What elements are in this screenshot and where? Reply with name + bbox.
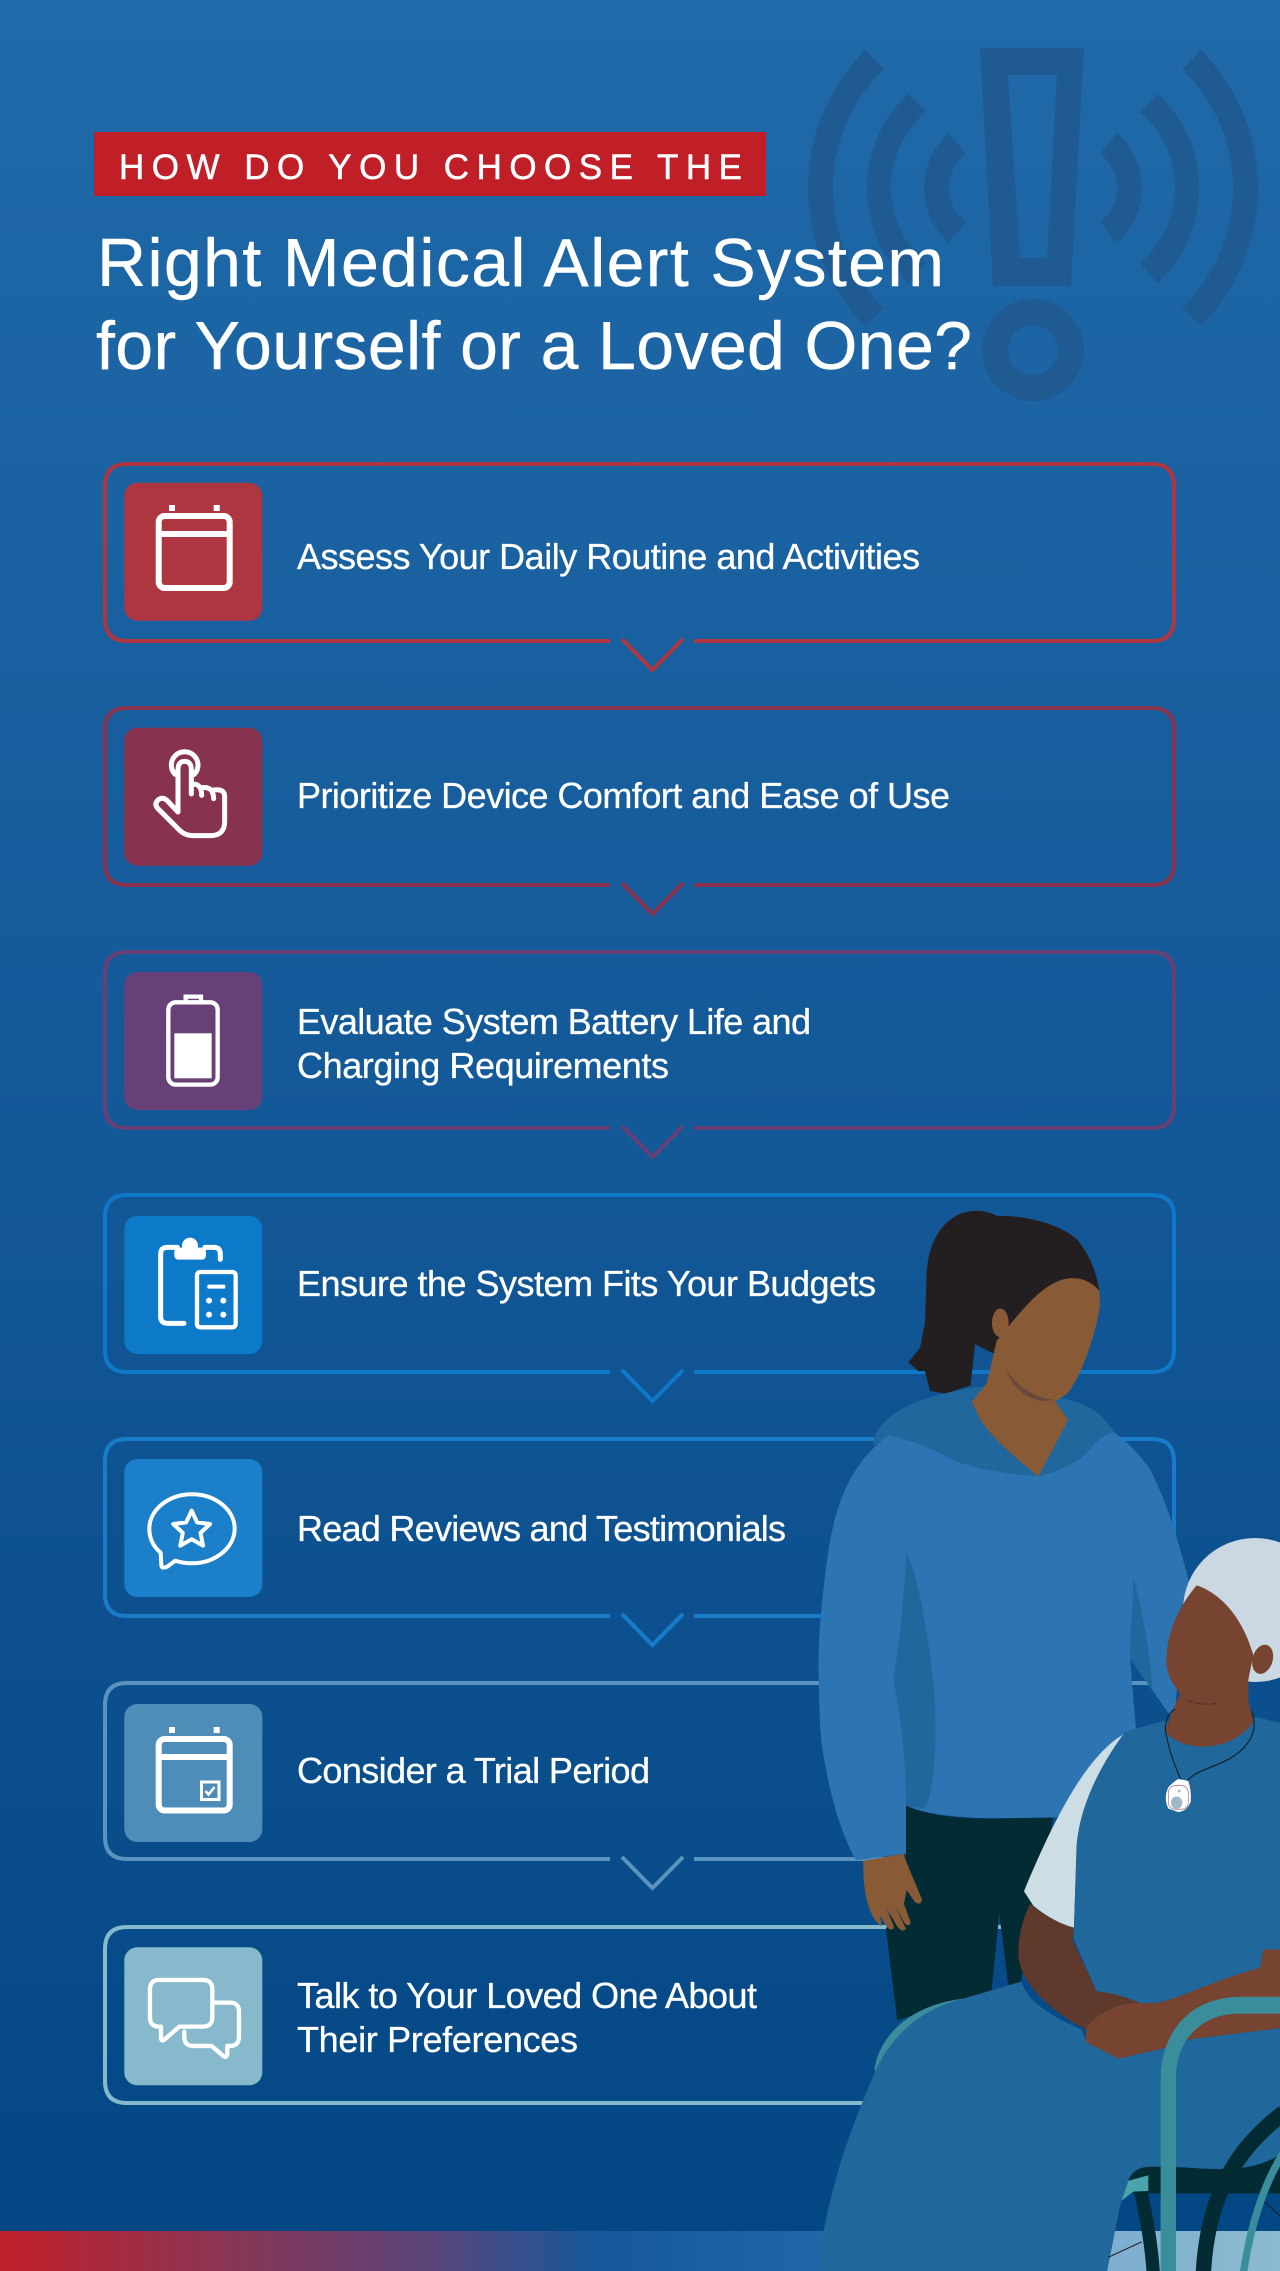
text: Talk to Your Loved One About bbox=[297, 1975, 757, 2016]
right sleeve bbox=[1255, 1780, 1280, 1951]
caregiver neck and face bbox=[972, 1278, 1100, 1476]
panel: step 7 bbox=[105, 1927, 1174, 2103]
caregiver figure bbox=[818, 1211, 1190, 2020]
icon: calendar bbox=[124, 483, 262, 621]
wheel spokes bbox=[1108, 2201, 1280, 2257]
chin shadow bbox=[1005, 1366, 1053, 1401]
footer gradient band bbox=[0, 2231, 1280, 2271]
main title: for Yourself or a Loved One? bbox=[96, 308, 972, 384]
eyebrow label: HOW DO YOU CHOOSE THE bbox=[119, 148, 742, 187]
text bbox=[297, 1975, 757, 2060]
icon: background alert symbol bbox=[808, 48, 1258, 401]
heading bbox=[94, 132, 972, 384]
wheel rim bbox=[1243, 2153, 1280, 2271]
upper arm bbox=[1018, 1904, 1140, 2030]
arrow: chevron bbox=[622, 883, 683, 914]
forearm and hand bbox=[1085, 1949, 1280, 2059]
trousers bbox=[886, 1806, 1053, 2020]
text: Charging Requirements bbox=[297, 1045, 669, 1086]
caregiver hand bbox=[863, 1854, 922, 1931]
main title: Right Medical Alert System bbox=[97, 225, 944, 301]
text: Consider a Trial Period bbox=[297, 1750, 650, 1791]
panel: step 6 bbox=[105, 1683, 1174, 1888]
sweater bbox=[818, 1432, 1190, 1860]
white hair bbox=[1183, 1538, 1280, 1682]
panel: step 4 bbox=[105, 1195, 1174, 1401]
blanket bbox=[817, 1982, 1280, 2271]
panel: step 2 bbox=[105, 708, 1174, 914]
icon: pointing hand bbox=[124, 728, 262, 866]
arrow: chevron bbox=[622, 1370, 683, 1401]
neck crease bbox=[1188, 1701, 1217, 1704]
arrow: chevron bbox=[622, 1857, 683, 1888]
wheelchair dark frame bbox=[1128, 2113, 1280, 2271]
icon: clipboard and calculator bbox=[124, 1216, 262, 1354]
wheelchair armrest tube bbox=[1168, 2005, 1280, 2271]
text: Assess Your Daily Routine and Activities bbox=[297, 536, 920, 577]
panel: step 3 bbox=[105, 952, 1174, 1157]
icon: review speech bubble bbox=[124, 1459, 262, 1597]
icon: calendar with check bbox=[124, 1704, 262, 1842]
arrow: chevron bbox=[622, 1126, 683, 1157]
text: Prioritize Device Comfort and Ease of Use bbox=[297, 775, 950, 816]
text: Their Preferences bbox=[297, 2019, 578, 2060]
text bbox=[297, 1001, 811, 1086]
teal seat bracket bbox=[1122, 2175, 1148, 2201]
text: Ensure the System Fits Your Budgets bbox=[297, 1263, 876, 1304]
neck and face bbox=[1165, 1585, 1253, 1747]
arrow: chevron bbox=[622, 1614, 683, 1645]
text: Evaluate System Battery Life and bbox=[297, 1001, 811, 1042]
hood bbox=[873, 1386, 1115, 1478]
necklace cord bbox=[1165, 1709, 1254, 1781]
ear bbox=[1248, 1642, 1277, 1677]
sleeve shadows bbox=[893, 1551, 935, 1809]
left sleeve bbox=[1024, 1734, 1125, 1928]
illustration: caregiver and woman in wheelchair bbox=[817, 1211, 1280, 2271]
main title bbox=[96, 225, 972, 384]
eyebrow label bbox=[94, 132, 766, 196]
teal backrest bbox=[874, 1999, 963, 2071]
caregiver ear bbox=[992, 1309, 1009, 1337]
text: Read Reviews and Testimonials bbox=[297, 1508, 786, 1549]
panel: step 5 bbox=[105, 1439, 1174, 1645]
shirt bbox=[1073, 1716, 1280, 2003]
panel: step 1 bbox=[105, 464, 1174, 670]
icon: chat bubbles bbox=[124, 1947, 262, 2085]
caregiver hair bbox=[908, 1211, 1099, 1394]
seated woman bbox=[817, 1538, 1280, 2271]
arrow: chevron bbox=[622, 639, 683, 670]
alert pendant bbox=[1166, 1779, 1191, 1812]
icon: battery bbox=[124, 972, 262, 1110]
